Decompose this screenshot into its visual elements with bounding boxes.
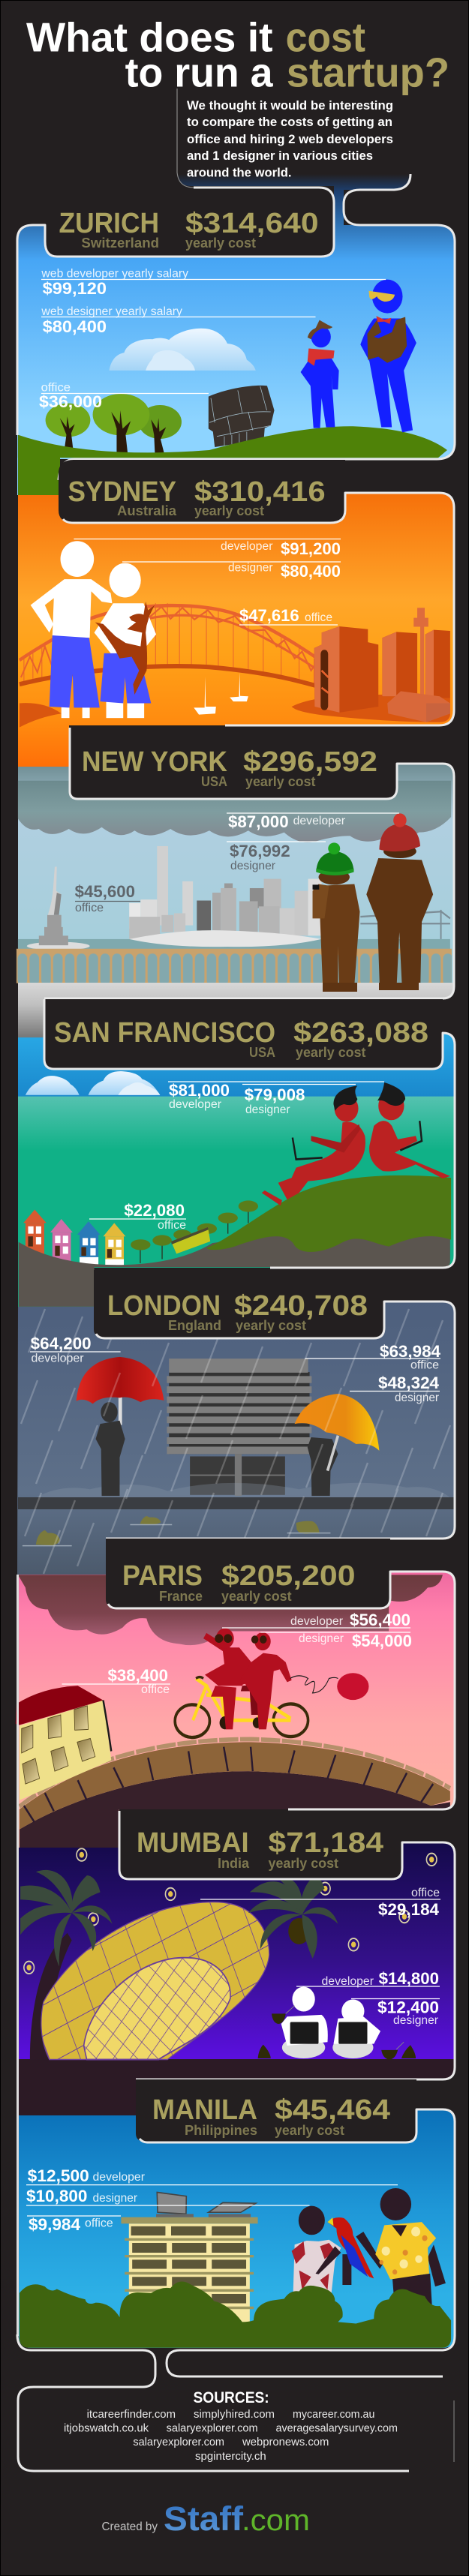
icon: palm trees: [20, 1870, 338, 1966]
icon: office building: [167, 1359, 311, 1496]
intro text: office and hiring 2 web developers: [187, 132, 393, 146]
hill: [206, 1175, 451, 1252]
icon: figures with laptops: [258, 1987, 416, 2059]
salary labels: [30, 1335, 441, 1404]
heading tab: Manila: [136, 2079, 455, 2376]
icon: harbour bridge: [20, 603, 329, 689]
heading tab: Sydney: SYDNEY: [68, 476, 176, 508]
panel: London: [17, 1270, 455, 1575]
heading tab: Zurich: ZURICH: [59, 208, 159, 239]
illustration: San Francisco scene: [19, 1071, 451, 1307]
heading tab: San Francisco: yearly cost: [296, 1044, 366, 1060]
salary labels: $12,400: [377, 1998, 439, 2016]
icon: domed building: [41, 1902, 269, 2059]
salary labels: $91,200: [281, 539, 341, 558]
icon: right figure with laptop: [369, 1082, 450, 1178]
wet ground haze: [36, 1483, 450, 1497]
salary labels: office: [141, 1683, 170, 1696]
salary labels: web designer yearly salary: [41, 305, 182, 318]
icon: tandem bicycle with riders: [175, 1629, 308, 1737]
salary labels: [89, 1081, 384, 1232]
heading tab: San Francisco: [44, 999, 455, 1268]
salary labels: $29,184: [378, 1900, 440, 1919]
panel: New York: [17, 728, 454, 1037]
salary labels: office: [85, 2217, 113, 2229]
icon: man in yellow floral shirt: [356, 2188, 446, 2309]
heading tab: New York: yearly cost: [245, 773, 315, 789]
sources list: mycareer.com.au: [293, 2408, 374, 2421]
salary labels: office: [75, 902, 104, 914]
salary labels: designer: [393, 2014, 438, 2027]
icon: trees: [46, 394, 182, 456]
heading tab: Mumbai: MUMBAI: [137, 1827, 249, 1859]
icon: photographer in green hat: [313, 842, 360, 992]
heading tab: London: [94, 1270, 455, 1539]
salary labels: $12,500: [28, 2166, 89, 2185]
panel: Manila: [19, 2079, 455, 2376]
footer: created by Staff.com: Staff: [164, 2499, 244, 2538]
salary labels: developer: [221, 540, 273, 553]
salary labels: developer: [93, 2171, 145, 2184]
ground: [19, 1235, 450, 1307]
footer: created by Staff.com: [102, 2499, 310, 2538]
footer: created by Staff.com: Created by: [102, 2520, 158, 2533]
heading tab: New York: [44, 728, 454, 998]
salary labels: $56,400: [350, 1611, 410, 1629]
salary labels: $14,800: [379, 1969, 439, 1988]
icon: figure with red umbrella: [77, 1357, 164, 1496]
salary labels: $87,000: [228, 812, 289, 831]
intro text: We thought it would be interesting: [187, 98, 393, 113]
sources list: [64, 2408, 398, 2463]
illustration: Paris scene: [16, 1575, 450, 1864]
sources list: itjobswatch.co.uk: [64, 2421, 149, 2435]
heading tab: Paris: yearly cost: [221, 1588, 292, 1604]
title: [26, 15, 449, 96]
salary labels: developer: [169, 1098, 221, 1111]
salary labels: $80,400: [281, 562, 341, 581]
sources list: salaryexplorer.com: [133, 2436, 224, 2448]
distant bridge: [360, 910, 450, 939]
heading tab: Sydney: Australia: [117, 503, 177, 518]
storm clouds: [18, 1575, 443, 1645]
icon: man in red hat: [366, 813, 433, 992]
illustration: Mumbai scene: [20, 1848, 437, 2059]
rain: [21, 1305, 450, 1574]
icon: skyline: [129, 846, 321, 947]
salary labels: designer: [395, 1392, 439, 1404]
heading tab: New York: USA: [201, 773, 227, 789]
feet over floor: [323, 983, 419, 992]
footer: created by Staff.com: .com: [242, 2504, 310, 2537]
green ribbon below hill: [18, 446, 60, 495]
salary labels: $47,616: [239, 606, 299, 625]
salary labels: [75, 812, 399, 914]
salary labels: $48,324: [378, 1374, 440, 1392]
heading tab: Zurich: [17, 89, 455, 480]
salary labels: designer: [299, 1632, 344, 1645]
heading tab: Mumbai: [119, 1811, 455, 2079]
salary labels: developer: [32, 1353, 84, 1365]
bottom dark band: [19, 2059, 455, 2115]
sources list: webpronews.com: [242, 2436, 329, 2448]
icon: parrot: [327, 2217, 374, 2278]
salary labels: office: [158, 1219, 186, 1232]
shoreline shadows: [20, 695, 450, 728]
heading tab: Sydney: yearly cost: [194, 503, 264, 518]
illustration: Zurich scene: [18, 280, 447, 458]
illustration: London scene: [36, 1357, 450, 1497]
storm clouds: [18, 781, 451, 842]
salary labels: $36,000: [39, 392, 102, 411]
salary labels: $63,984: [380, 1342, 441, 1361]
salary labels: designer: [93, 2192, 137, 2205]
heading tab: Manila: $45,464: [275, 2094, 390, 2126]
salary labels: $81,000: [169, 1081, 230, 1100]
salary labels: [62, 1611, 412, 1696]
salary labels: designer: [228, 562, 273, 575]
icon: balloon: [290, 1673, 368, 1700]
salary labels: [39, 267, 386, 411]
heading tab: New York: NEW YORK: [82, 746, 228, 778]
salary labels: web developer yearly salary: [41, 267, 188, 280]
sources list: averagesalarysurvey.com: [276, 2421, 398, 2435]
salary labels: office: [411, 1887, 440, 1899]
heading tab: Paris: [106, 1539, 455, 1809]
panel: Zurich: [17, 89, 455, 495]
icon: trees and tram: [131, 1200, 258, 1263]
icon: house: [16, 1686, 111, 1800]
panel: Mumbai: [19, 1811, 455, 2115]
sources list: itcareerfinder.com: [87, 2408, 176, 2421]
pavement band: [18, 1497, 455, 1509]
hill: [18, 426, 447, 458]
salary labels: $9,984: [29, 2215, 81, 2234]
salary labels: $38,400: [108, 1666, 168, 1685]
intro text: and 1 designer in various cities: [187, 149, 373, 163]
water band: [18, 939, 450, 950]
bushes: [20, 2281, 451, 2348]
heading tab: Manila: Philippines: [185, 2122, 257, 2138]
heading tab: London: LONDON: [107, 1290, 221, 1322]
salary labels: office: [41, 382, 71, 395]
salary labels: $99,120: [43, 279, 107, 298]
heading tab: Mumbai: yearly cost: [269, 1855, 338, 1871]
salary labels: developer: [293, 815, 345, 827]
heading tab: Zurich: yearly cost: [185, 235, 256, 251]
salary labels: developer: [290, 1615, 343, 1628]
salary labels: $76,992: [230, 842, 290, 860]
icon: left figure with laptop: [262, 1085, 365, 1205]
palm trunk: [30, 1933, 72, 2059]
intro text: to compare the costs of getting an: [187, 115, 392, 129]
sources list: spgintercity.ch: [195, 2450, 266, 2463]
icon: figure one: [31, 541, 112, 718]
floor strip: [18, 983, 454, 1037]
heading tab: Paris: $205,200: [221, 1560, 356, 1592]
heading tab: New York: $296,592: [243, 746, 377, 778]
heading tab: London: $240,708: [234, 1290, 368, 1322]
intro text: around the world.: [187, 165, 291, 180]
title: to run a: [125, 50, 273, 96]
icon: street lights: [24, 1848, 437, 1974]
heading: sources: SOURCES:: [194, 2389, 269, 2406]
heading tab: San Francisco: USA: [249, 1044, 275, 1060]
icon: fish in flood: [23, 1516, 330, 1546]
icon: tall developer figure: [360, 280, 416, 432]
heading tab: San Francisco: $263,088: [293, 1017, 428, 1049]
salary labels: designer: [230, 860, 275, 872]
title: cost: [286, 15, 365, 60]
icon: figure two with kangaroo: [95, 563, 156, 718]
salary labels: office: [305, 611, 332, 624]
fence: [17, 949, 452, 983]
intro text: [187, 98, 393, 180]
sources list: simplyhired.com: [194, 2408, 275, 2421]
icon: man in red floral shirt: [292, 2206, 351, 2293]
heading tab: London: England: [168, 1317, 221, 1333]
panel: Sydney: [18, 460, 454, 767]
illustration: Manila scene: [20, 2188, 451, 2348]
icon: small designer figure: [301, 320, 339, 428]
left panel edge stroke: [17, 1575, 19, 2336]
heading tab: Paris: France: [159, 1588, 203, 1604]
icon: clouds: [109, 329, 256, 371]
heading tab: Zurich: Switzerland: [81, 235, 159, 251]
icon: office tower with laptops: [121, 2193, 258, 2324]
panel: Paris: [16, 1539, 455, 1864]
title: What does it: [26, 15, 273, 60]
salary labels: [74, 539, 341, 625]
icon: clouds: [26, 1071, 160, 1095]
salary labels: $79,008: [245, 1085, 305, 1104]
heading tab: Mumbai: $71,184: [269, 1827, 383, 1859]
salary labels: $64,200: [31, 1335, 92, 1353]
salary labels: office: [410, 1359, 439, 1372]
salary labels: [200, 1887, 440, 2027]
salary labels: $80,400: [43, 317, 107, 336]
salary labels: $22,080: [124, 1201, 185, 1220]
icon: figure with orange umbrella: [295, 1394, 379, 1496]
icon: bridge: [20, 1739, 450, 1864]
heading tab: Zurich: $314,640: [185, 208, 318, 239]
illustration: Sydney scene: [20, 541, 450, 728]
salary labels: [26, 2166, 398, 2234]
heading tab: London: yearly cost: [236, 1317, 306, 1333]
salary labels: $54,000: [352, 1632, 412, 1650]
salary labels: $10,800: [26, 2187, 87, 2205]
panel: San Francisco: [18, 999, 455, 1307]
title: startup?: [287, 50, 449, 96]
heading tab: Sydney: $310,416: [194, 476, 326, 508]
heading tab: Paris: PARIS: [122, 1560, 203, 1592]
heading tab: Manila: yearly cost: [275, 2122, 344, 2138]
sources list: salaryexplorer.com: [167, 2421, 258, 2435]
heading tab: Manila: MANILA: [152, 2094, 257, 2126]
panel: sources: [17, 2334, 454, 2471]
heading tab: Mumbai: India: [218, 1855, 250, 1871]
salary labels: $45,600: [75, 882, 135, 901]
icon: city buildings: [314, 608, 450, 722]
icon: building: [209, 386, 275, 447]
illustration: New York scene: [17, 781, 452, 992]
salary labels: developer: [321, 1975, 374, 1988]
heading tab: San Francisco: SAN FRANCISCO: [54, 1017, 275, 1049]
icon: painted-lady houses: [23, 1209, 125, 1266]
salary labels: designer: [245, 1103, 290, 1116]
icon: sailboats: [194, 672, 248, 715]
icon: Statue of Liberty: [27, 867, 90, 950]
heading tab: Sydney: [59, 460, 454, 725]
